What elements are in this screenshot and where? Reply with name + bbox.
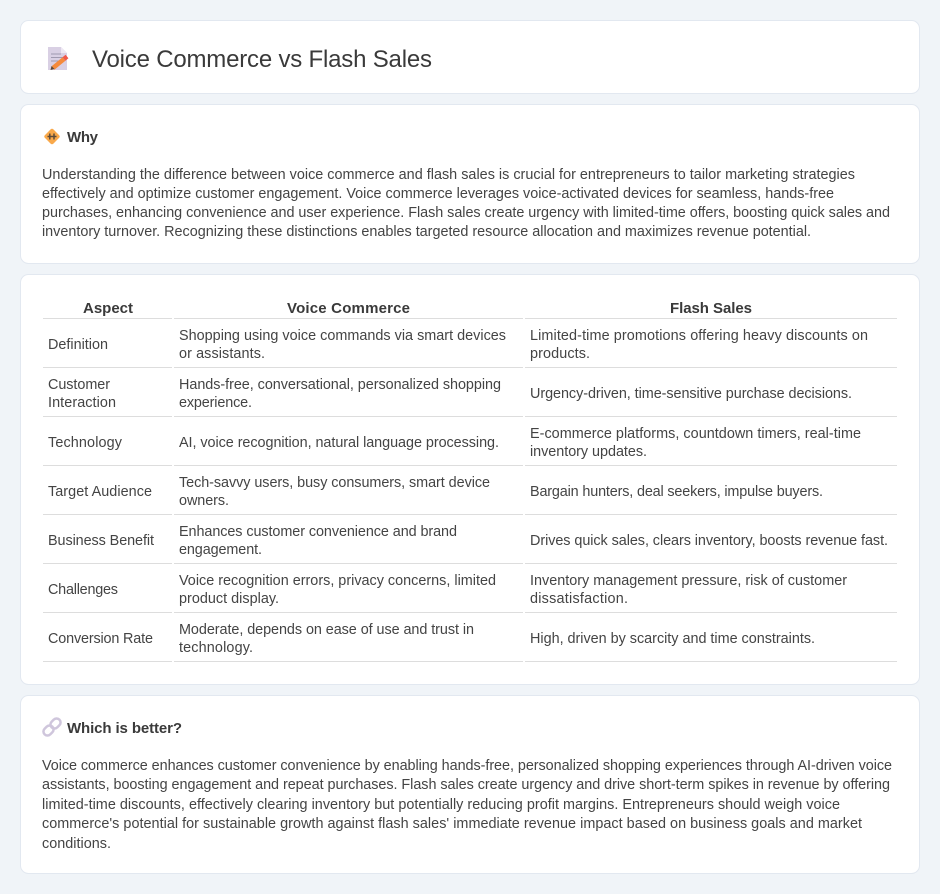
row: conversion rate	[43, 622, 897, 662]
row: conversion rate: Moderate, depends on ease of use and trust in	[179, 622, 474, 638]
text block: why paragraph: effectively and optimize customer engagement. Voice commerce leverages voice-activated devices for seamless, hands-free	[42, 186, 834, 202]
heading: which is better: Which is better?	[67, 720, 182, 737]
row: business benefit: engagement.	[179, 542, 262, 558]
row: challenges: Inventory management pressure, risk of customer	[530, 573, 847, 589]
table header: Flash Sales	[670, 300, 752, 317]
text block: why paragraph: inventory turnover. Recognizing these distinctions enables targeted resource allocation and maximizes revenue potential.	[42, 224, 811, 240]
row: challenges: dissatisfaction.	[530, 591, 628, 607]
row: definition: or assistants.	[179, 346, 265, 362]
row: technology: E-commerce platforms, countdown timers, real-time	[530, 426, 861, 442]
row: challenges: product display.	[179, 591, 279, 607]
panel: comparison table	[20, 274, 920, 684]
icon: document with pencil	[48, 47, 67, 70]
row: challenges: Challenges	[48, 582, 118, 598]
table header: Aspect	[83, 300, 133, 317]
row: conversion rate: High, driven by scarcity and time constraints.	[530, 631, 815, 647]
row: customer interaction	[43, 377, 897, 417]
text block: why paragraph: purchases, enhancing convenience and user experience. Flash sales create urgency with limited-time offers, boosting quick sales and	[42, 205, 890, 221]
row: technology: inventory updates.	[530, 444, 647, 460]
row: challenges: Voice recognition errors, privacy concerns, limited	[179, 573, 496, 589]
row: target audience	[43, 475, 897, 515]
title: Voice Commerce vs Flash Sales	[92, 46, 432, 73]
text block: which is better paragraph	[42, 758, 892, 852]
icon: link	[42, 717, 62, 737]
row: customer interaction: Hands-free, conversational, personalized shopping	[179, 377, 501, 393]
row: target audience: owners.	[179, 493, 229, 509]
text block: which is better paragraph: conditions.	[42, 836, 111, 852]
row: technology: Technology	[48, 435, 123, 451]
row: definition: Definition	[48, 337, 108, 353]
row: target audience: Bargain hunters, deal seekers, impulse buyers.	[530, 484, 823, 500]
text block: which is better paragraph: assistants, boosting engagement and repeat purchases. Flash sales create urgency and drive short-term spikes in revenue by offering	[42, 777, 890, 793]
table header	[43, 300, 897, 319]
row: definition: Limited-time promotions offering heavy discounts on	[530, 328, 868, 344]
row: target audience: Target Audience	[48, 484, 152, 500]
row: definition: Shopping using voice commands via smart devices	[179, 328, 506, 344]
row: business benefit: Enhances customer convenience and brand	[179, 524, 457, 540]
panel: which is better	[20, 696, 920, 874]
panel: why	[20, 104, 920, 264]
row: customer interaction: Interaction	[48, 395, 116, 411]
row: technology	[43, 426, 897, 466]
row: business benefit: Business Benefit	[48, 533, 154, 549]
row: technology: AI, voice recognition, natural language processing.	[179, 435, 499, 451]
text block: why paragraph: Understanding the difference between voice commerce and flash sales is crucial for entrepreneurs to tailor marketing strategies	[42, 167, 855, 183]
row: business benefit	[43, 524, 897, 564]
panel: title header	[20, 20, 920, 94]
text block: which is better paragraph: Voice commerce enhances customer convenience by enabling hands-free, personalized shopping experiences through AI-driven voice	[42, 758, 892, 774]
row: customer interaction: Customer	[48, 377, 110, 393]
row: definition: products.	[530, 346, 590, 362]
row: business benefit: Drives quick sales, clears inventory, boosts revenue fast.	[530, 533, 888, 549]
text block: which is better paragraph: commerce's potential for sustainable growth against flash sales' immediate revenue impact based on business goals and market	[42, 816, 862, 832]
table header: Voice Commerce	[287, 300, 410, 317]
text block: why paragraph	[42, 167, 890, 240]
row: customer interaction: experience.	[179, 395, 252, 411]
icon: construction diamond	[44, 128, 60, 145]
row: conversion rate: Conversion Rate	[48, 631, 153, 647]
row: challenges	[43, 573, 897, 613]
heading: why: Why	[67, 129, 99, 146]
row: target audience: Tech-savvy users, busy consumers, smart device	[179, 475, 490, 491]
row: conversion rate: technology.	[179, 640, 253, 656]
row: customer interaction: Urgency-driven, time-sensitive purchase decisions.	[530, 386, 852, 402]
row: definition	[43, 328, 897, 368]
text block: which is better paragraph: limited-time discounts, effectively clearing inventory but potentially reducing profit margins. Entrepreneurs should weigh voice	[42, 797, 840, 813]
